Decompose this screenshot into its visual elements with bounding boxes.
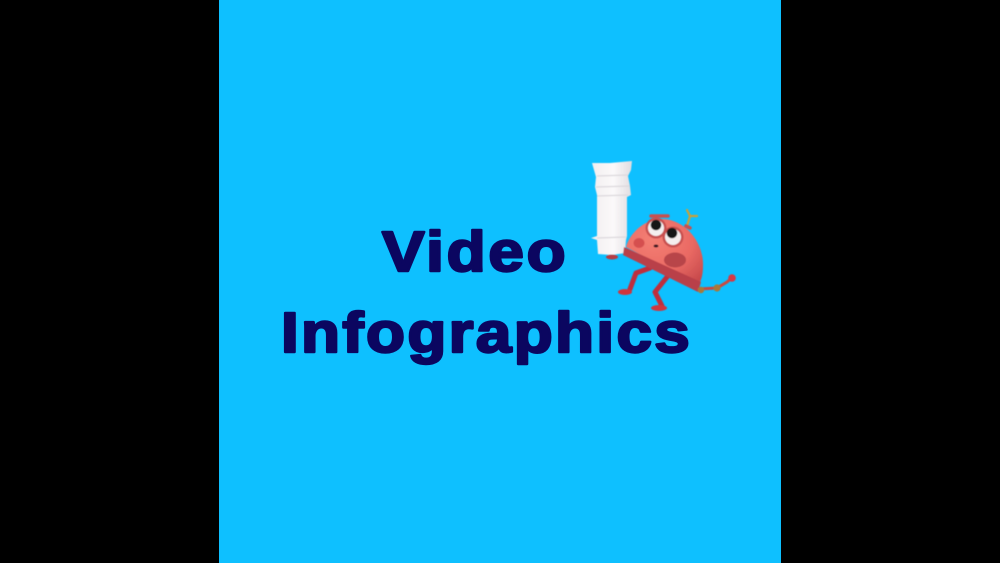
icon: eyes [646, 216, 690, 248]
icon: legs [630, 268, 667, 306]
icon: cheek spots [634, 238, 686, 268]
icon: body rim [623, 247, 701, 292]
icon: antenna [687, 210, 697, 226]
icon: paper stack [591, 161, 632, 255]
title: Video Infographics: Infographics [281, 300, 690, 364]
icon: red dome body [626, 219, 703, 285]
icon: mouth [654, 244, 658, 248]
icon: cartoon character carrying a paper stack [591, 161, 736, 311]
title: Video Infographics [281, 219, 690, 364]
icon: right arm [698, 274, 736, 293]
icon: back hand under stack [606, 254, 618, 260]
title: Video Infographics: Video [382, 219, 566, 283]
panel: blue background [219, 0, 781, 563]
icon: shoes [618, 289, 667, 311]
